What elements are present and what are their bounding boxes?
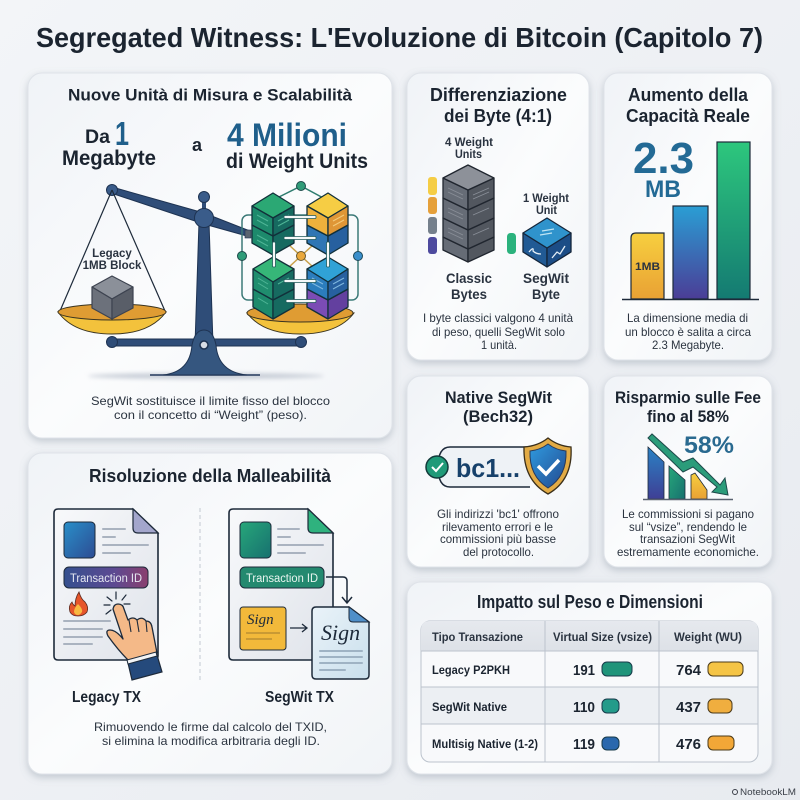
caption: malleabilità <box>94 720 327 748</box>
row: legacy p2pkh: 191 <box>573 662 595 679</box>
caption: differenziazione: I byte classici valgono 4 unità <box>423 311 573 325</box>
heading: native segwit <box>445 389 552 426</box>
panel: aumento della capacità <box>604 73 772 360</box>
row: multisig native <box>432 736 734 753</box>
headline: da 1 megabyte: Da <box>85 127 110 148</box>
heading: aumento <box>626 85 750 126</box>
row: legacy p2pkh: 764 <box>676 662 702 679</box>
heading: differenziazione <box>430 85 567 126</box>
icon: clicking hand <box>104 592 162 680</box>
row: legacy p2pkh <box>432 662 743 679</box>
heading: differenziazione: dei Byte (4:1) <box>444 106 552 126</box>
label: segwit byte: SegWit <box>523 270 569 286</box>
caption: native segwit: rilevamento errori e le <box>442 520 553 534</box>
heading: impatto: Impatto sul Peso e Dimensioni <box>477 592 703 612</box>
label: 1mb: 1MB <box>635 261 660 273</box>
label: segwit tx: SegWit TX <box>265 689 335 706</box>
caption: malleabilità: Rimuovendo le firme dal calcolo del TXID, <box>94 720 327 734</box>
divider <box>199 508 201 680</box>
label: segwit byte: Byte <box>532 286 560 302</box>
row: multisig native: Multisig Native (1-2) <box>432 739 538 751</box>
heading: native segwit: Native SegWit <box>445 389 552 407</box>
label: 1 weight unit: 1 Weight <box>523 193 569 205</box>
caption: nuove unità: con il concetto di “Weight” (peso). <box>114 408 307 422</box>
label: classic bytes: Bytes <box>451 286 487 302</box>
row: segwit native: 110 <box>573 699 595 716</box>
caption: risparmio: estremamente economiche. <box>617 545 759 559</box>
label: sign large: Sign <box>321 620 360 645</box>
label: transaction id segwit: Transaction ID <box>246 573 318 585</box>
table header: Weight (WU) <box>674 632 742 644</box>
heading: risparmio: Risparmio sulle Fee <box>615 389 761 407</box>
headline: 4 milioni: 4 Milioni <box>227 117 347 153</box>
connector word a: a <box>192 135 203 155</box>
credit: notebooklm: NotebookLM <box>740 787 796 797</box>
panel: nuove unità di misura <box>28 73 392 438</box>
label: segwit byte <box>523 270 569 302</box>
heading: risparmio: fino al 58% <box>647 408 729 426</box>
icon: legacy transaction document <box>54 509 158 660</box>
label: legacy 1mb block: Legacy <box>92 248 132 260</box>
stat: 58%: 58% <box>684 432 734 459</box>
caption: risparmio: Le commissioni si pagano <box>622 507 754 521</box>
headline: da 1 megabyte: Megabyte <box>62 147 156 170</box>
caption: native segwit <box>437 507 559 559</box>
icon: flame <box>69 592 88 616</box>
row: segwit native: 437 <box>676 699 701 716</box>
row: segwit native: SegWit Native <box>432 702 507 714</box>
orange and blue stack <box>307 193 348 255</box>
label: classic bytes <box>446 270 492 302</box>
table header: Virtual Size (vsize) <box>553 632 652 644</box>
caption: nuove unità: SegWit sostituisce il limite fisso del blocco <box>91 394 330 408</box>
heading: aumento: Aumento della <box>628 85 749 105</box>
icon: green pill <box>507 233 516 254</box>
icon: legacy block cube <box>92 276 133 319</box>
caption: capacità: 2.3 Megabyte. <box>652 338 724 352</box>
table header <box>432 632 742 644</box>
caption: native segwit: del protocollo. <box>463 545 534 559</box>
stat: 2.3 mb: MB <box>645 176 681 203</box>
table header: Tipo Transazione <box>432 632 523 644</box>
caption: malleabilità: si elimina la modifica arbitraria degli ID. <box>102 734 320 748</box>
headline: 4 milioni <box>226 117 368 173</box>
label: 1 weight unit: Unit <box>536 205 557 217</box>
label: transaction id legacy: Transaction ID <box>70 573 142 585</box>
headline: da 1 megabyte <box>62 115 156 170</box>
title: Segregated Witness: L'Evoluzione di Bitcoin (Capitolo 7) <box>36 22 763 53</box>
bar chart: block size <box>622 142 759 300</box>
headline: da 1 megabyte: 1 <box>115 115 129 152</box>
caption: capacità: un blocco è salita a circa <box>625 325 751 339</box>
label: 4 weight units: Units <box>455 149 482 161</box>
blue and purple stack <box>307 257 348 319</box>
heading: aumento: Capacità Reale <box>626 106 750 126</box>
panel: impatto sul peso <box>407 582 772 774</box>
caption: native segwit: Gli indirizzi 'bc1' offrono <box>437 507 559 521</box>
heading: malleabilità: Risoluzione della Malleabilità <box>89 466 332 486</box>
panel: risparmio sulle fee <box>604 376 772 567</box>
row: legacy p2pkh: Legacy P2PKH <box>432 665 510 677</box>
icon: witness document <box>312 607 369 679</box>
heading: native segwit: (Bech32) <box>463 408 533 426</box>
icon: classic server stack <box>443 165 494 262</box>
caption: differenziazione: di peso, quelli SegWit solo <box>432 325 565 339</box>
icon: balance scale <box>58 184 354 379</box>
heading: differenziazione: Differenziazione <box>430 85 567 105</box>
row: segwit native <box>432 699 732 716</box>
caption: capacità: La dimensione media di <box>627 311 748 325</box>
caption: differenziazione <box>423 311 573 352</box>
heading: risparmio <box>615 389 761 426</box>
stat: 2.3 mb: 2.3 <box>633 134 694 183</box>
label: legacy 1mb block <box>83 248 142 272</box>
arrow: id to signature <box>326 577 352 603</box>
icon: bc1 address pill <box>426 447 530 487</box>
caption: nuove unità <box>91 394 330 422</box>
row: multisig native: 476 <box>676 736 701 753</box>
label: legacy tx: Legacy TX <box>72 689 142 706</box>
panel: native segwit <box>407 376 589 567</box>
icon: segwit network of blocks <box>238 182 362 319</box>
label: legacy 1mb block: 1MB Block <box>83 260 142 272</box>
green stack one <box>252 193 294 255</box>
icon: segwit transaction document <box>229 509 352 660</box>
label: sign small: Sign <box>247 612 274 628</box>
caption: risparmio <box>617 507 759 559</box>
chart: falling fees <box>643 434 733 500</box>
icon: four colored pills <box>428 177 437 254</box>
arrow: signature moved <box>290 624 307 632</box>
panel: differenziazione dei byte <box>407 73 589 360</box>
heading: nuove unità: Nuove Unità di Misura e Scalabilità <box>68 86 353 104</box>
arrow: downward trend <box>648 434 728 495</box>
label: bc1: bc1... <box>456 453 520 483</box>
label: 1 weight unit <box>523 193 569 217</box>
caption: capacità <box>625 311 751 352</box>
caption: differenziazione: 1 unità. <box>481 338 517 352</box>
caption: risparmio: sul “vsize”, rendendo le <box>629 520 747 534</box>
icon: shield <box>524 438 571 494</box>
panel: risoluzione della malleabilità <box>28 453 392 774</box>
table: transaction sizes <box>421 621 758 762</box>
caption: native segwit: commissioni più basse <box>440 532 556 546</box>
caption: risparmio: transazioni SegWit <box>640 532 736 546</box>
label: 4 weight units <box>445 137 493 161</box>
headline: 4 milioni: di Weight Units <box>226 150 368 173</box>
label: classic bytes: Classic <box>446 270 492 286</box>
label: 4 weight units: 4 Weight <box>445 137 493 149</box>
icon: segwit cube <box>523 218 571 267</box>
green stack two <box>253 257 294 319</box>
row: multisig native: 119 <box>573 736 595 753</box>
